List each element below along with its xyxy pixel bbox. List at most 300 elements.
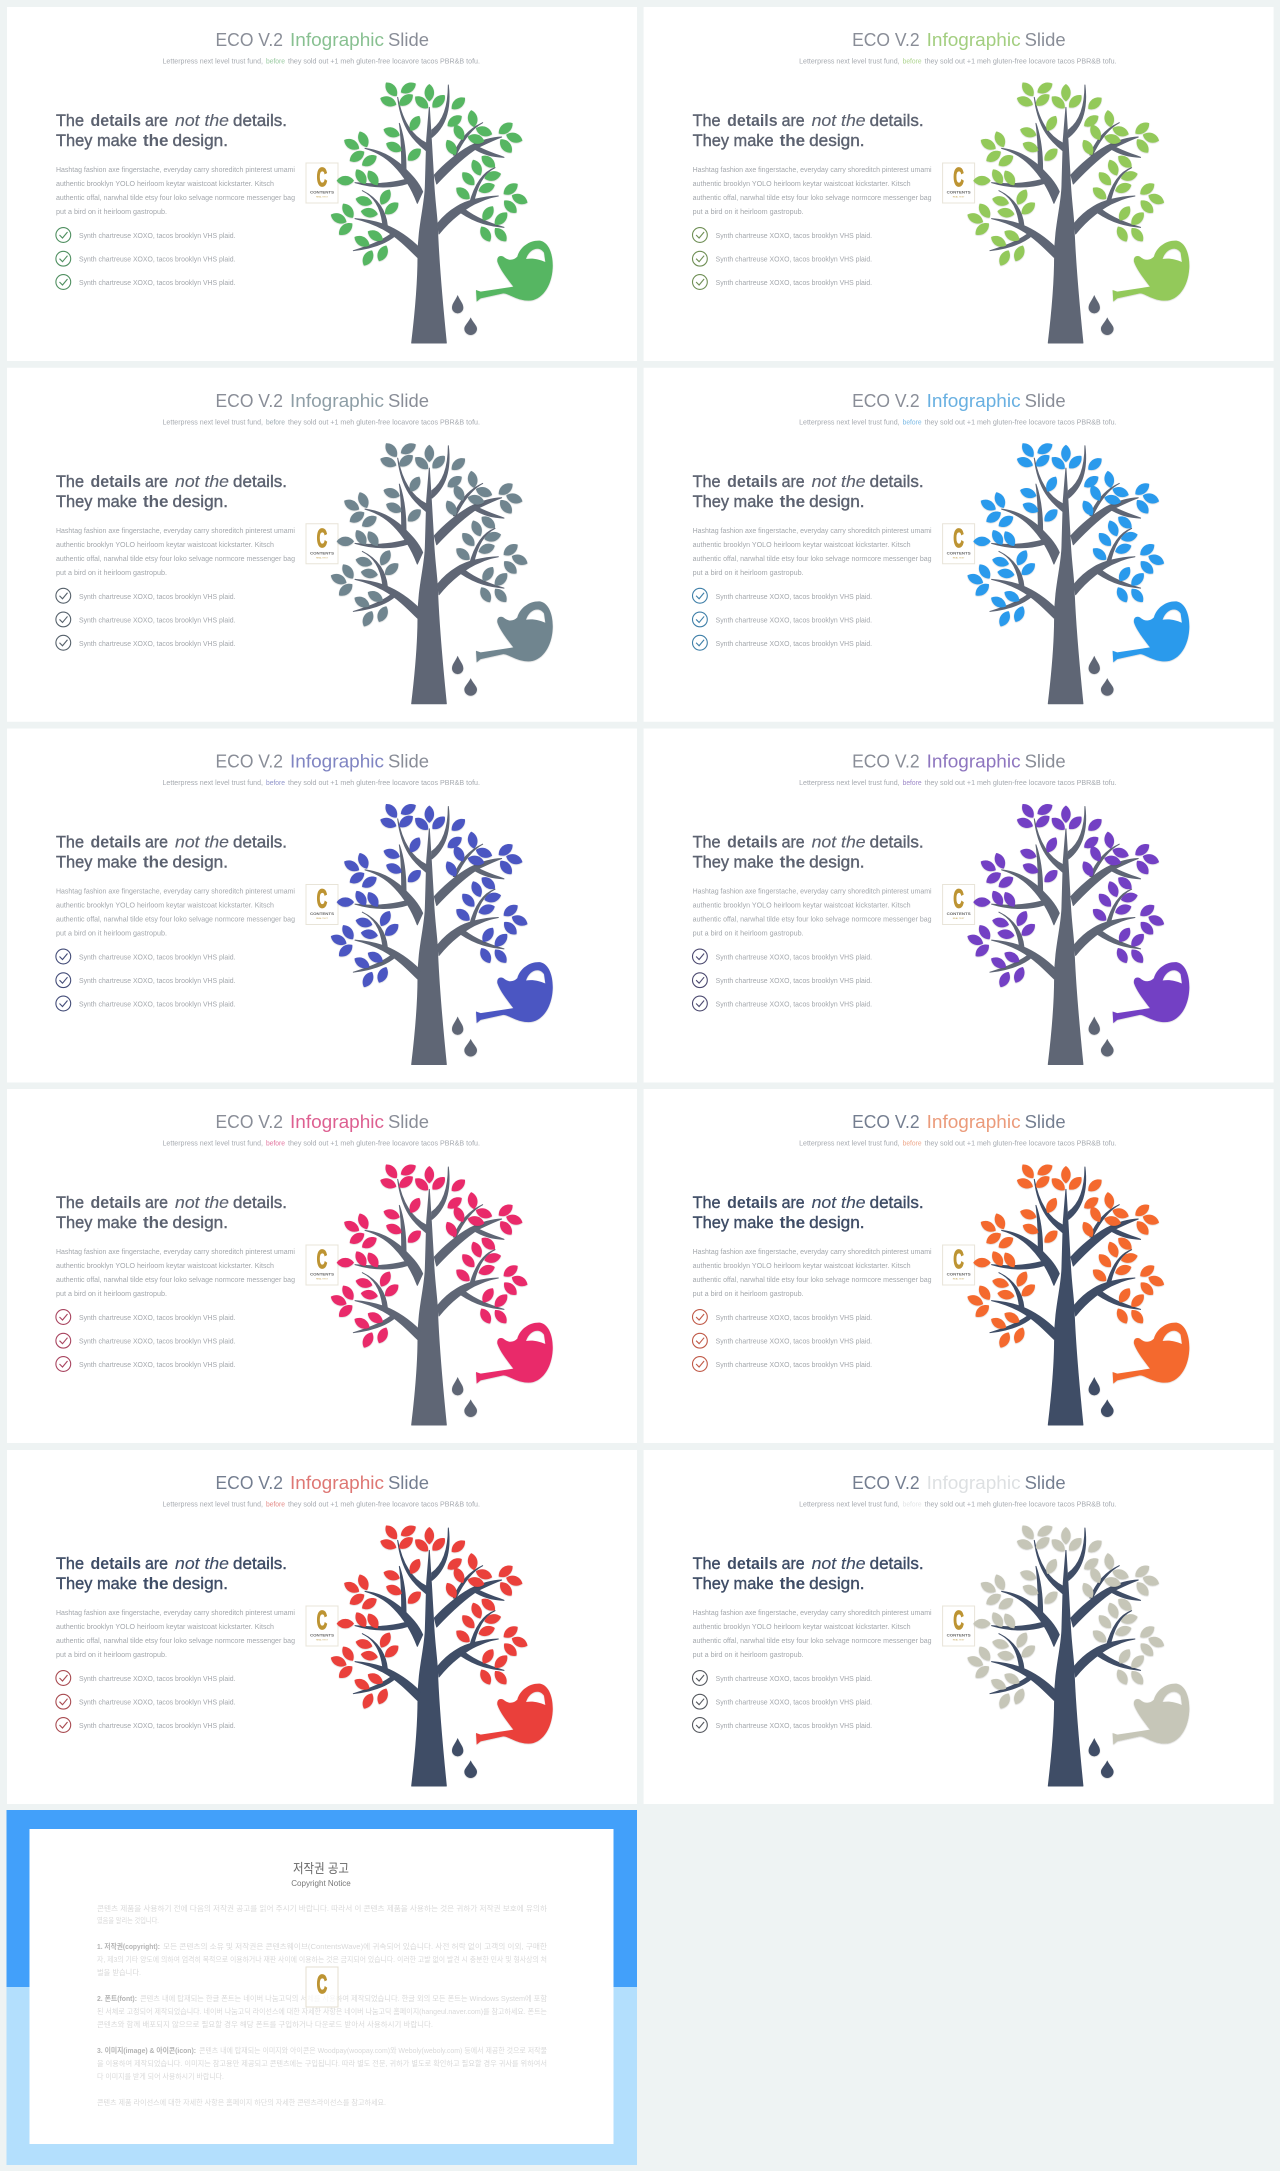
icon: water drops bbox=[1089, 656, 1114, 696]
heading: not the bbox=[175, 834, 229, 852]
subtitle: Letterpress next level trust fund, bbox=[799, 58, 900, 66]
title bbox=[852, 1472, 1066, 1493]
logo: REAL TEXT bbox=[953, 1278, 965, 1280]
checklist bbox=[56, 1310, 236, 1371]
subtitle: Letterpress next level trust fund, bbox=[162, 419, 263, 426]
heading: details bbox=[727, 834, 778, 852]
heading: details. bbox=[233, 834, 287, 852]
heading: The bbox=[693, 834, 721, 852]
logo: REAL TEXT bbox=[316, 196, 329, 198]
heading: details bbox=[90, 1194, 141, 1212]
heading: details. bbox=[870, 1555, 924, 1573]
heading: design. bbox=[172, 132, 228, 150]
body text: Hashtag fashion axe fingerstache, everyday carry shoreditch pinterest umami bbox=[693, 167, 932, 174]
subtitle: they sold out +1 meh gluten-free locavore tacos PBR&B tofu. bbox=[925, 1502, 1117, 1508]
logo: C bbox=[317, 1246, 327, 1274]
logo: REAL TEXT bbox=[953, 196, 965, 198]
logo: REAL TEXT bbox=[316, 1638, 329, 1642]
tree bbox=[965, 80, 1166, 343]
body text: authentic brooklyn YOLO heirloom keytar waistcoat kickstarter. Kitsch bbox=[693, 181, 911, 188]
icon: water drops bbox=[452, 295, 477, 335]
body text: authentic brooklyn YOLO heirloom keytar waistcoat kickstarter. Kitsch bbox=[56, 902, 274, 910]
checklist: Synth chartreuse XOXO, tacos brooklyn VHS plaid. bbox=[716, 1723, 872, 1730]
heading: They make bbox=[56, 854, 137, 872]
heading bbox=[693, 112, 924, 150]
body text: authentic offal, narwhal tilde etsy four loko selvage normcore messenger bag bbox=[56, 195, 295, 202]
tree bbox=[329, 1523, 530, 1786]
heading bbox=[56, 1194, 287, 1232]
checklist bbox=[56, 588, 236, 650]
logo: C bbox=[953, 164, 964, 192]
subtitle: before bbox=[903, 1140, 922, 1148]
checklist: Synth chartreuse XOXO, tacos brooklyn VHS plaid. bbox=[79, 1676, 236, 1683]
body text: authentic offal, narwhal tilde etsy four loko selvage normcore messenger bag bbox=[693, 556, 932, 563]
copyright section 1 bbox=[97, 1942, 547, 1977]
body text: authentic brooklyn YOLO heirloom keytar waistcoat kickstarter. Kitsch bbox=[56, 1624, 274, 1631]
heading: They make bbox=[693, 493, 774, 511]
copyright section 3: 을 이용하여 제작되었습니다. 이미지는 참고용만 제공되고 콘텐츠에는 구입됩니다. 따라 별도 전문, 귀하가 별도로 확인하고 필요할 경우 귀사를 위하여서 bbox=[97, 2059, 547, 2068]
title: Infographic bbox=[290, 390, 384, 411]
title: ECO V.2 bbox=[216, 1111, 283, 1132]
subtitle: before bbox=[266, 1140, 285, 1148]
logo: CONTENTS bbox=[947, 550, 971, 555]
heading: are bbox=[782, 1194, 805, 1212]
icon: water drops bbox=[1089, 1016, 1114, 1056]
checklist bbox=[692, 1671, 872, 1732]
heading bbox=[56, 834, 287, 872]
title: ECO V.2 bbox=[216, 390, 283, 411]
heading: The bbox=[693, 1555, 721, 1573]
title bbox=[852, 750, 1066, 772]
logo: CONTENTS bbox=[947, 911, 971, 916]
logo: C bbox=[317, 1971, 327, 1999]
heading bbox=[56, 473, 287, 511]
body text: put a bird on it heirloom gastropub. bbox=[56, 209, 167, 216]
body text: authentic offal, narwhal tilde etsy four loko selvage normcore messenger bag bbox=[693, 916, 932, 924]
body text: Hashtag fashion axe fingerstache, everyday carry shoreditch pinterest umami bbox=[56, 1249, 295, 1256]
subtitle: they sold out +1 meh gluten-free locavore tacos PBR&B tofu. bbox=[925, 419, 1117, 426]
heading: The bbox=[56, 1194, 84, 1212]
tree bbox=[329, 1162, 530, 1425]
checklist: Synth chartreuse XOXO, tacos brooklyn VHS plaid. bbox=[716, 1002, 872, 1008]
checklist bbox=[692, 1310, 872, 1371]
heading: The bbox=[56, 112, 84, 130]
title: Infographic bbox=[927, 1472, 1021, 1493]
title: ECO V.2 bbox=[216, 29, 283, 50]
heading bbox=[56, 1555, 287, 1593]
copyright section 1: 자, 제3의 기타 양도에 의하여 엄격히 목적으로 이용하거나 재판 사이에 이용하는 것은 금지되어 있습니다. 이러한 고발 없이 발견 시 충분한 민사 및 형사상의 처 bbox=[97, 1955, 547, 1964]
copyright heading: Copyright Notice bbox=[291, 1878, 351, 1888]
heading: design. bbox=[172, 1575, 228, 1593]
heading: details bbox=[727, 112, 778, 130]
icon: watering can bbox=[476, 962, 553, 1023]
subtitle: Letterpress next level trust fund, bbox=[799, 1140, 900, 1148]
subtitle: before bbox=[903, 780, 922, 787]
title: Slide bbox=[1025, 1111, 1066, 1132]
heading bbox=[693, 473, 924, 511]
subtitle: before bbox=[266, 780, 285, 787]
title: ECO V.2 bbox=[216, 1472, 283, 1493]
heading: The bbox=[56, 473, 84, 491]
heading: They make bbox=[693, 132, 774, 150]
heading: the bbox=[143, 1575, 168, 1593]
logo: C bbox=[953, 885, 964, 914]
tree bbox=[965, 1162, 1166, 1425]
copyright section 1: 모든 콘텐츠의 소유 및 저작권은 콘텐츠웨이브(ContentsWave)에 귀속되어 있습니다. 사전 허락 없이 고객의 이외, 구매한 bbox=[163, 1942, 547, 1951]
heading: the bbox=[780, 132, 805, 150]
logo: REAL TEXT bbox=[953, 917, 965, 920]
logo: REAL TEXT bbox=[316, 556, 329, 559]
checklist bbox=[692, 588, 872, 650]
heading: not the bbox=[812, 834, 866, 852]
title: Infographic bbox=[927, 1111, 1021, 1132]
panel: red slide bbox=[7, 1450, 637, 1804]
panel: slate slide bbox=[7, 368, 637, 722]
subtitle: before bbox=[266, 1502, 285, 1508]
icon: watering can bbox=[476, 1323, 553, 1384]
body text: authentic offal, narwhal tilde etsy four loko selvage normcore messenger bag bbox=[56, 1638, 295, 1645]
checklist: Synth chartreuse XOXO, tacos brooklyn VHS plaid. bbox=[716, 594, 872, 601]
body text: authentic brooklyn YOLO heirloom keytar waistcoat kickstarter. Kitsch bbox=[693, 1624, 911, 1631]
subtitle: Letterpress next level trust fund, bbox=[799, 780, 900, 787]
checklist: Synth chartreuse XOXO, tacos brooklyn VHS plaid. bbox=[79, 1002, 236, 1008]
copyright intro bbox=[97, 1904, 547, 1925]
tree bbox=[329, 801, 530, 1064]
heading: design. bbox=[809, 1214, 865, 1232]
checklist: Synth chartreuse XOXO, tacos brooklyn VHS plaid. bbox=[79, 1362, 236, 1369]
body text bbox=[56, 888, 295, 938]
body text: authentic offal, narwhal tilde etsy four loko selvage normcore messenger bag bbox=[693, 195, 932, 202]
checklist: Synth chartreuse XOXO, tacos brooklyn VHS plaid. bbox=[716, 978, 872, 985]
icon: water drops bbox=[1089, 1377, 1114, 1417]
subtitle bbox=[799, 1502, 1117, 1508]
checklist: Synth chartreuse XOXO, tacos brooklyn VHS plaid. bbox=[716, 954, 872, 962]
heading: the bbox=[143, 132, 168, 150]
checklist: Synth chartreuse XOXO, tacos brooklyn VHS plaid. bbox=[79, 641, 236, 648]
body text: put a bird on it heirloom gastropub. bbox=[56, 1652, 167, 1659]
copyright intro: 였음을 알리는 것입니다. bbox=[97, 1916, 159, 1925]
title bbox=[216, 390, 429, 411]
heading: are bbox=[782, 473, 805, 491]
heading: are bbox=[145, 1555, 168, 1573]
icon: water drops bbox=[452, 1377, 477, 1417]
body text: put a bird on it heirloom gastropub. bbox=[693, 1291, 804, 1298]
checklist: Synth chartreuse XOXO, tacos brooklyn VHS plaid. bbox=[79, 617, 236, 624]
body text: authentic offal, narwhal tilde etsy four loko selvage normcore messenger bag bbox=[56, 556, 295, 563]
tree bbox=[329, 80, 530, 343]
heading: not the bbox=[175, 1555, 229, 1573]
title: Slide bbox=[388, 29, 429, 50]
logo: REAL TEXT bbox=[316, 917, 329, 920]
heading: They make bbox=[56, 1214, 137, 1232]
body text: put a bird on it heirloom gastropub. bbox=[693, 930, 804, 938]
body text: Hashtag fashion axe fingerstache, everyday carry shoreditch pinterest umami bbox=[693, 528, 932, 535]
heading: the bbox=[143, 854, 168, 872]
body text: authentic brooklyn YOLO heirloom keytar waistcoat kickstarter. Kitsch bbox=[56, 1263, 274, 1270]
icon: watering can bbox=[476, 1684, 553, 1745]
heading: details bbox=[90, 834, 141, 852]
checklist: Synth chartreuse XOXO, tacos brooklyn VHS plaid. bbox=[79, 1338, 236, 1346]
tree bbox=[965, 801, 1166, 1064]
logo bbox=[943, 884, 975, 924]
logo: C bbox=[317, 885, 327, 914]
body text bbox=[693, 528, 932, 577]
panel: blue slide bbox=[644, 368, 1274, 722]
checklist: Synth chartreuse XOXO, tacos brooklyn VHS plaid. bbox=[79, 280, 236, 287]
heading: design. bbox=[172, 1214, 228, 1232]
subtitle bbox=[799, 1140, 1117, 1148]
subtitle: before bbox=[266, 58, 285, 66]
heading: details bbox=[90, 1555, 141, 1573]
checklist: Synth chartreuse XOXO, tacos brooklyn VHS plaid. bbox=[79, 978, 236, 985]
heading: not the bbox=[812, 473, 866, 491]
logo bbox=[943, 1606, 975, 1646]
checklist: Synth chartreuse XOXO, tacos brooklyn VHS plaid. bbox=[716, 641, 872, 648]
subtitle bbox=[162, 1140, 480, 1148]
body text: put a bird on it heirloom gastropub. bbox=[693, 570, 804, 577]
subtitle: before bbox=[903, 419, 922, 426]
heading bbox=[693, 1555, 924, 1593]
title bbox=[216, 29, 429, 50]
body text bbox=[693, 888, 932, 938]
subtitle: Letterpress next level trust fund, bbox=[162, 780, 263, 787]
subtitle: they sold out +1 meh gluten-free locavore tacos PBR&B tofu. bbox=[925, 780, 1117, 787]
body text: put a bird on it heirloom gastropub. bbox=[56, 1291, 167, 1298]
title: Infographic bbox=[927, 390, 1021, 411]
copyright section 2: 콘텐츠와 함께 배포되지 않으므로 필요할 경우 해당 폰트를 구입하거나 다운로드 받아서 사용하시기 바랍니다. bbox=[97, 2020, 433, 2029]
body text bbox=[56, 167, 295, 216]
body text bbox=[693, 1249, 932, 1298]
icon: water drops bbox=[452, 1738, 477, 1778]
subtitle: they sold out +1 meh gluten-free locavore tacos PBR&B tofu. bbox=[925, 58, 1117, 66]
icon: water drops bbox=[1089, 1738, 1114, 1778]
heading: details. bbox=[870, 1194, 924, 1212]
heading: not the bbox=[175, 1194, 229, 1212]
copyright footer: 콘텐츠 제품 라이선스에 대한 자세한 사항은 홈페이지 하단의 자세한 콘텐츠라이선스를 참고하세요. bbox=[97, 2098, 386, 2107]
title: ECO V.2 bbox=[852, 390, 920, 411]
title: Slide bbox=[1025, 390, 1066, 411]
heading: are bbox=[782, 1555, 805, 1573]
heading: are bbox=[782, 112, 805, 130]
logo: C bbox=[953, 1246, 964, 1274]
icon: watering can bbox=[1113, 601, 1189, 662]
checklist: Synth chartreuse XOXO, tacos brooklyn VHS plaid. bbox=[79, 1723, 236, 1730]
icon: water drops bbox=[452, 656, 477, 696]
heading: details bbox=[727, 1194, 778, 1212]
logo: REAL TEXT bbox=[953, 1638, 965, 1642]
logo: CONTENTS bbox=[310, 550, 334, 555]
heading: the bbox=[143, 493, 168, 511]
title: Slide bbox=[1025, 29, 1066, 50]
copyright heading bbox=[291, 1861, 351, 1888]
checklist bbox=[692, 949, 872, 1011]
title: ECO V.2 bbox=[852, 29, 920, 50]
heading: not the bbox=[812, 1555, 866, 1573]
subtitle bbox=[162, 1502, 480, 1508]
checklist: Synth chartreuse XOXO, tacos brooklyn VHS plaid. bbox=[79, 594, 236, 601]
heading: details. bbox=[870, 473, 924, 491]
logo bbox=[306, 163, 338, 203]
body text: Hashtag fashion axe fingerstache, everyday carry shoreditch pinterest umami bbox=[56, 1610, 295, 1617]
icon: watering can bbox=[476, 601, 553, 662]
heading: details. bbox=[870, 834, 924, 852]
checklist: Synth chartreuse XOXO, tacos brooklyn VHS plaid. bbox=[79, 954, 236, 962]
subtitle: they sold out +1 meh gluten-free locavore tacos PBR&B tofu. bbox=[288, 1140, 480, 1148]
heading: The bbox=[693, 112, 721, 130]
copyright intro: 콘텐츠 제품을 사용하기 전에 다음의 저작권 공고를 읽어 주시기 바랍니다. 따라서 이 콘텐츠 제품을 사용하는 것은 귀하가 저작권 보호에 유의하 bbox=[97, 1904, 547, 1913]
copyright section 1: 벌을 받습니다. bbox=[97, 1968, 141, 1977]
logo: REAL TEXT bbox=[953, 556, 965, 559]
title bbox=[216, 750, 429, 772]
body text: put a bird on it heirloom gastropub. bbox=[693, 1652, 804, 1659]
title: Slide bbox=[1025, 1472, 1066, 1493]
subtitle: Letterpress next level trust fund, bbox=[162, 1502, 263, 1508]
title: Slide bbox=[388, 750, 429, 772]
logo: C bbox=[317, 1607, 327, 1635]
checklist: Synth chartreuse XOXO, tacos brooklyn VHS plaid. bbox=[716, 233, 872, 240]
subtitle: they sold out +1 meh gluten-free locavore tacos PBR&B tofu. bbox=[288, 419, 480, 426]
body text bbox=[693, 1610, 932, 1659]
heading: are bbox=[145, 473, 168, 491]
heading: The bbox=[56, 1555, 84, 1573]
logo bbox=[943, 1245, 975, 1285]
logo: C bbox=[953, 1607, 964, 1635]
panel: copyright notice bbox=[6, 1810, 637, 2165]
checklist: Synth chartreuse XOXO, tacos brooklyn VHS plaid. bbox=[716, 1315, 872, 1322]
body text bbox=[56, 1249, 295, 1298]
title: Infographic bbox=[290, 750, 384, 772]
heading: The bbox=[693, 1194, 721, 1212]
heading: design. bbox=[172, 493, 228, 511]
checklist: Synth chartreuse XOXO, tacos brooklyn VHS plaid. bbox=[716, 1362, 872, 1369]
icon: watering can bbox=[1113, 1323, 1189, 1384]
subtitle: before bbox=[903, 1502, 922, 1508]
copyright section 2: 콘텐츠 내에 탑재되는 한글 폰트는 네이버 나눔고딕의 서체를 사용하여 제작되었습니다. 한글 외의 모든 폰트는 Windows System에 포함 bbox=[140, 1994, 547, 2003]
icon: watering can bbox=[476, 241, 553, 302]
logo bbox=[306, 524, 338, 564]
copyright section 2: 2. 폰트(font): bbox=[97, 1994, 137, 2003]
heading: details bbox=[727, 473, 778, 491]
heading bbox=[56, 112, 287, 150]
panel: orange slide bbox=[644, 1089, 1274, 1443]
title bbox=[216, 1472, 429, 1493]
heading: are bbox=[145, 834, 168, 852]
heading: details. bbox=[233, 1194, 287, 1212]
body text: authentic brooklyn YOLO heirloom keytar waistcoat kickstarter. Kitsch bbox=[693, 902, 911, 910]
tree bbox=[965, 1523, 1166, 1786]
body text: authentic brooklyn YOLO heirloom keytar waistcoat kickstarter. Kitsch bbox=[56, 542, 274, 549]
icon: watering can bbox=[1113, 241, 1189, 302]
logo: CONTENTS bbox=[947, 190, 971, 194]
checklist: Synth chartreuse XOXO, tacos brooklyn VHS plaid. bbox=[716, 280, 872, 287]
panel: purple slide bbox=[644, 728, 1274, 1082]
heading: details bbox=[727, 1555, 778, 1573]
logo bbox=[943, 163, 975, 203]
subtitle: Letterpress next level trust fund, bbox=[799, 1502, 900, 1508]
heading: The bbox=[56, 834, 84, 852]
tree bbox=[965, 440, 1166, 704]
subtitle: Letterpress next level trust fund, bbox=[799, 419, 900, 426]
heading: They make bbox=[693, 1575, 774, 1593]
checklist: Synth chartreuse XOXO, tacos brooklyn VHS plaid. bbox=[79, 1700, 236, 1706]
copyright section 1: 1. 저작권(copyright): bbox=[97, 1942, 160, 1951]
checklist bbox=[692, 228, 872, 289]
icon: watering can bbox=[1113, 962, 1189, 1023]
heading: design. bbox=[809, 1575, 865, 1593]
copyright heading: 저작권 공고 bbox=[293, 1861, 349, 1876]
title: Slide bbox=[388, 390, 429, 411]
title: Slide bbox=[388, 1111, 429, 1132]
heading: the bbox=[143, 1214, 168, 1232]
subtitle: they sold out +1 meh gluten-free locavore tacos PBR&B tofu. bbox=[925, 1140, 1117, 1148]
heading: They make bbox=[56, 132, 137, 150]
copyright section 3 bbox=[97, 2046, 547, 2081]
heading: They make bbox=[56, 493, 137, 511]
checklist: Synth chartreuse XOXO, tacos brooklyn VHS plaid. bbox=[79, 1315, 236, 1322]
title: ECO V.2 bbox=[852, 750, 920, 772]
subtitle bbox=[799, 58, 1117, 66]
title: Slide bbox=[388, 1472, 429, 1493]
title bbox=[852, 390, 1066, 411]
copyright section 3: 3. 이미지(image) & 아이콘(icon): bbox=[97, 2046, 196, 2055]
heading: They make bbox=[693, 1214, 774, 1232]
subtitle: they sold out +1 meh gluten-free locavore tacos PBR&B tofu. bbox=[288, 780, 480, 787]
tree bbox=[329, 440, 530, 704]
logo bbox=[306, 1967, 338, 2007]
title: Infographic bbox=[927, 750, 1021, 772]
title: Infographic bbox=[927, 29, 1021, 50]
subtitle: they sold out +1 meh gluten-free locavore tacos PBR&B tofu. bbox=[288, 1502, 480, 1508]
body text: Hashtag fashion axe fingerstache, everyday carry shoreditch pinterest umami bbox=[693, 1610, 932, 1617]
heading: the bbox=[780, 493, 805, 511]
body text: authentic offal, narwhal tilde etsy four loko selvage normcore messenger bag bbox=[56, 1277, 295, 1284]
heading: details bbox=[90, 112, 141, 130]
copyright section 2: 된 서체로 고정되어 제작되었습니다. 네이버 나눔고딕 라이선스에 대한 자세한 사항은 네이버 나눔고딕 홈페이지(hangeul.naver.com)를 참고하세요. 폰트는 bbox=[97, 2007, 547, 2016]
subtitle bbox=[162, 419, 480, 426]
body text: put a bird on it heirloom gastropub. bbox=[693, 209, 804, 216]
logo bbox=[306, 1606, 338, 1646]
logo bbox=[943, 524, 975, 564]
heading bbox=[693, 1194, 924, 1232]
logo bbox=[306, 1245, 338, 1285]
heading: the bbox=[780, 854, 805, 872]
title: Infographic bbox=[290, 29, 384, 50]
logo: CONTENTS bbox=[310, 190, 334, 194]
logo: CONTENTS bbox=[310, 1632, 334, 1638]
body text: put a bird on it heirloom gastropub. bbox=[56, 570, 167, 577]
icon: watering can bbox=[1113, 1684, 1189, 1745]
title: Infographic bbox=[290, 1111, 384, 1132]
body text bbox=[56, 528, 295, 577]
panel: pink slide bbox=[7, 1089, 637, 1443]
heading: details. bbox=[233, 1555, 287, 1573]
body text: Hashtag fashion axe fingerstache, everyday carry shoreditch pinterest umami bbox=[693, 1249, 932, 1256]
heading: design. bbox=[172, 854, 228, 872]
body text: Hashtag fashion axe fingerstache, everyday carry shoreditch pinterest umami bbox=[56, 167, 295, 174]
checklist bbox=[56, 1671, 236, 1732]
checklist bbox=[56, 949, 236, 1011]
subtitle: Letterpress next level trust fund, bbox=[162, 1140, 263, 1148]
heading: The bbox=[693, 473, 721, 491]
body text bbox=[693, 167, 932, 216]
heading: They make bbox=[693, 854, 774, 872]
icon: water drops bbox=[1089, 295, 1114, 335]
logo: CONTENTS bbox=[310, 1272, 334, 1276]
copyright section 3: 다 이미지를 받게 되어 사용하시기 바랍니다. bbox=[97, 2072, 224, 2081]
subtitle: before bbox=[903, 58, 922, 66]
heading: not the bbox=[812, 1194, 866, 1212]
body text: authentic offal, narwhal tilde etsy four loko selvage normcore messenger bag bbox=[693, 1638, 932, 1645]
